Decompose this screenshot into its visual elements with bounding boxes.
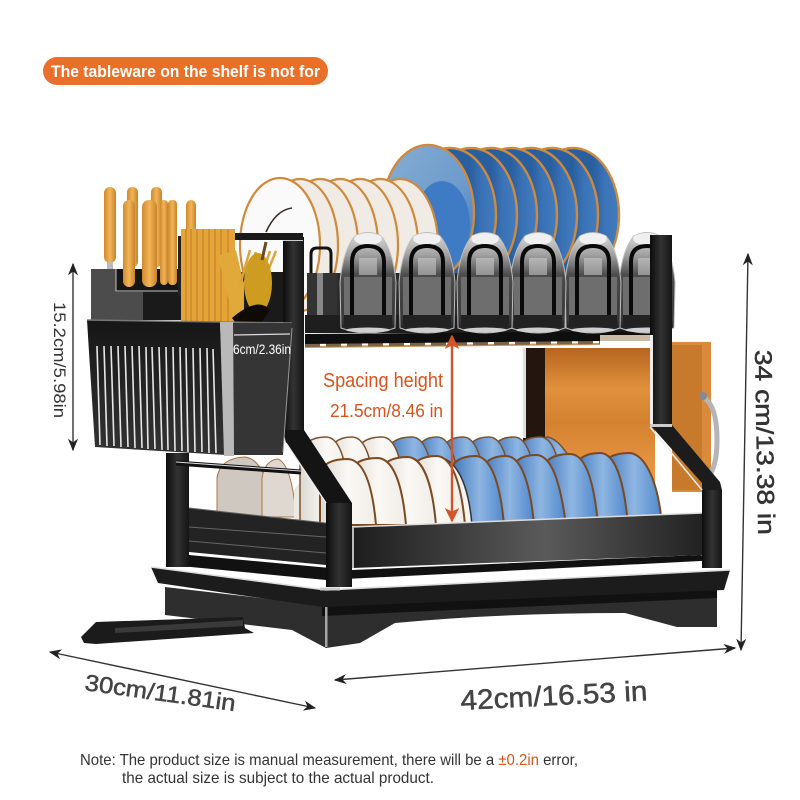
dish rack product (81, 145, 730, 648)
dimension: total height: 34 cm/13.38 in (749, 350, 779, 535)
utensil caddy (87, 320, 292, 456)
knife block (91, 236, 184, 320)
cutting boards (523, 342, 717, 492)
golden forks and spoon (218, 242, 283, 322)
dimension: total length: 42cm/16.53 in (460, 675, 648, 716)
orange badge (43, 57, 328, 85)
drain spout (81, 617, 254, 644)
cup holder band and shelf (305, 248, 652, 347)
orange badge: The tableware on the shelf is not for (51, 62, 320, 81)
spacing height label: Spacing height (323, 370, 443, 392)
base stand (165, 587, 717, 648)
glass mugs (340, 232, 675, 333)
spacing height arrow (451, 336, 453, 521)
note: Note: The product size is manual measurement, there will be a ±0.2in error, (80, 752, 578, 769)
note: the actual size is subject to the actual product. (122, 770, 434, 787)
lower shelf back plate row (300, 437, 578, 525)
blue plates on top shelf (382, 145, 619, 282)
white plates on top shelf (240, 178, 438, 312)
lower shelf left plates (217, 457, 325, 520)
dimension: total length (335, 648, 735, 716)
caddy ribs (97, 346, 216, 453)
note (80, 752, 578, 787)
spacing height label: 21.5cm/8.46 in (330, 400, 443, 421)
dimension: depth (50, 652, 315, 716)
rack rails and posts (166, 233, 722, 587)
dimension: caddy height: 15.2cm/5.98in (50, 302, 68, 418)
chopsticks (181, 229, 235, 322)
caddy width dimension: 6cm/2.36in (233, 341, 291, 357)
dimension: depth: 30cm/11.81in (83, 669, 237, 716)
knives (104, 187, 196, 287)
caddy width dimension (233, 334, 291, 357)
dimension: total height (741, 254, 779, 650)
lower shelf front plate row (320, 453, 662, 525)
drip tray (151, 555, 730, 607)
spacing height label (323, 370, 443, 421)
